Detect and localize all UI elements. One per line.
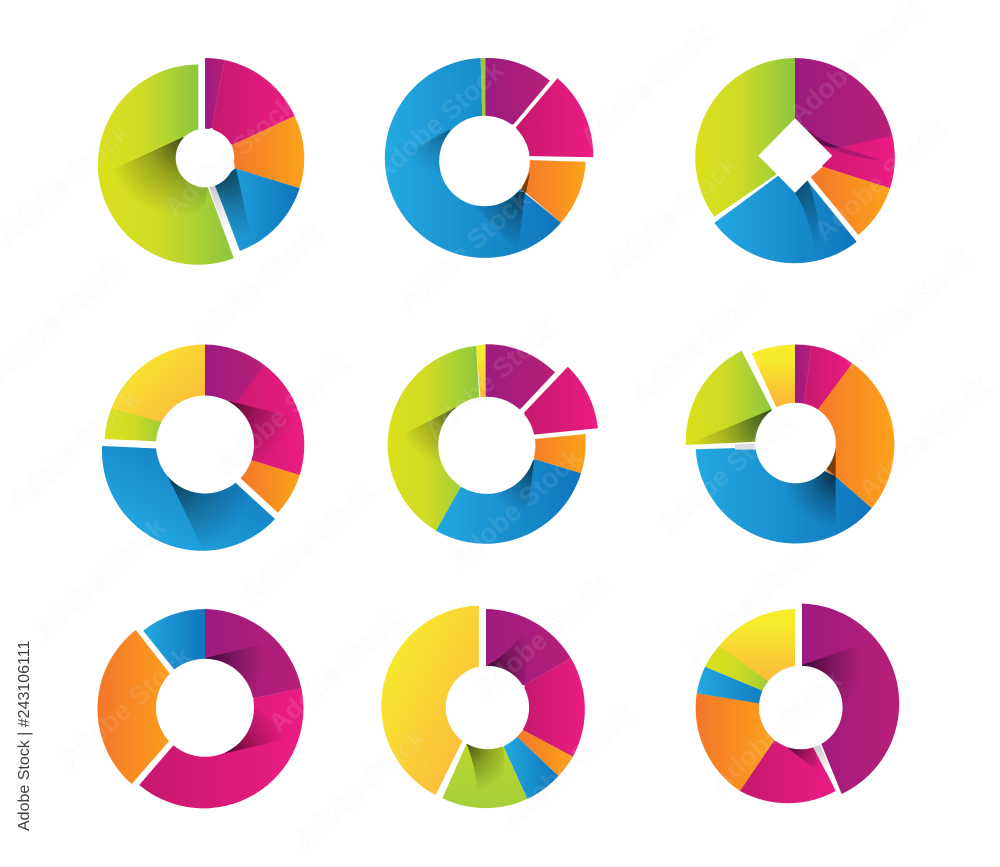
segment: lime bbox=[695, 58, 795, 217]
fold shadow: blue lower bbox=[460, 190, 525, 252]
segment: purple bbox=[205, 344, 264, 401]
segment: magenta bbox=[516, 78, 593, 157]
watermark pattern: Adobe Stock bbox=[601, 148, 744, 282]
segment: lime upper bbox=[98, 64, 198, 173]
fold shadow: magenta bbox=[225, 705, 296, 753]
watermark pattern: Adobe Stock bbox=[835, 242, 978, 376]
stock image id, vertical text: Adobe Stock | #243106111 bbox=[16, 641, 33, 831]
watermark pattern: Adobe Stock bbox=[211, 347, 354, 481]
watermark pattern: Adobe Stock bbox=[679, 535, 822, 669]
segment: lime bbox=[686, 351, 772, 445]
fold shadow: lime bbox=[686, 409, 772, 445]
fold shadow: lime bbox=[105, 137, 208, 240]
segment: blue bbox=[385, 58, 561, 258]
segment: purple bbox=[795, 58, 892, 147]
center hole bbox=[755, 403, 836, 483]
segment: blue bbox=[143, 609, 205, 670]
donut 5 bbox=[388, 344, 598, 544]
watermark pattern: Adobe Stock bbox=[393, 183, 536, 317]
watermark pattern: Adobe Stock bbox=[3, 382, 146, 516]
watermark pattern: Adobe Stock bbox=[471, 570, 614, 704]
fold shadow: magenta bbox=[225, 400, 301, 470]
watermark pattern: Adobe Stock bbox=[55, 640, 198, 774]
watermark pattern: Adobe Stock bbox=[29, 511, 172, 645]
watermark pattern: Adobe Stock bbox=[445, 441, 588, 575]
segment: blue bbox=[436, 459, 581, 544]
fold shadow: magenta bbox=[788, 745, 818, 772]
donut 3: diamond centre bbox=[695, 58, 895, 263]
center hole bbox=[176, 129, 234, 187]
segment: orange bbox=[696, 693, 775, 791]
segment: purple bbox=[205, 58, 225, 130]
watermark pattern: Adobe Stock bbox=[653, 406, 796, 540]
donut 1: five segments with lime exploded bbox=[98, 58, 304, 265]
watermark pattern: Adobe Stock bbox=[627, 277, 770, 411]
segment: purple bbox=[205, 609, 301, 698]
center hole bbox=[446, 666, 529, 749]
center hole bbox=[156, 659, 254, 757]
fold shadow: blue bbox=[480, 461, 534, 535]
donut 4 bbox=[102, 344, 304, 551]
fold shadow: purple bbox=[802, 644, 868, 715]
segment: yellow bbox=[752, 344, 795, 410]
watermark pattern: Adobe Stock bbox=[575, 19, 718, 153]
watermark pattern: Adobe Stock bbox=[853, 371, 996, 505]
watermark pattern: Adobe Stock bbox=[237, 476, 380, 610]
segment: purple bbox=[486, 609, 571, 690]
segment: lime bbox=[388, 346, 481, 531]
center hole bbox=[156, 396, 254, 494]
fold shadow: magenta bbox=[815, 140, 880, 160]
watermark pattern: Adobe Stock bbox=[783, 0, 926, 130]
segment: purple bbox=[486, 344, 555, 410]
segment: purple bbox=[486, 58, 550, 125]
fold shadow: blue upper bbox=[401, 129, 452, 180]
center hole bbox=[759, 666, 843, 749]
watermark pattern: Adobe Stock bbox=[809, 113, 952, 247]
segment: blue bbox=[102, 446, 275, 551]
segment: blue bbox=[215, 168, 300, 251]
fold shadow: blue bbox=[215, 168, 252, 250]
segment: purple bbox=[802, 604, 899, 794]
fold shadow: purple bbox=[486, 623, 528, 690]
segment: orange bbox=[810, 363, 894, 508]
fold shadow: blue bbox=[770, 450, 836, 534]
orange fold shadow bbox=[521, 172, 530, 193]
segment: magenta bbox=[524, 367, 598, 435]
segment: purple sliver bbox=[795, 344, 812, 410]
donut 2: large blue with exploded magenta bbox=[385, 58, 593, 258]
segment: magenta bbox=[220, 365, 304, 475]
gap shadow: blue and lime bbox=[735, 443, 770, 450]
segment: blue bbox=[714, 170, 857, 263]
segment: orange bbox=[517, 730, 573, 776]
fold shadow: blue bbox=[780, 172, 819, 260]
segment: blue bbox=[504, 737, 558, 799]
fold shadow: lime bbox=[466, 740, 505, 797]
watermark pattern: Adobe Stock bbox=[367, 54, 510, 188]
gap shadow bbox=[813, 745, 832, 772]
center hole bbox=[438, 397, 535, 494]
segment: orange bbox=[521, 160, 586, 223]
segment: magenta bbox=[805, 130, 895, 188]
segment: lime sliver bbox=[481, 58, 486, 120]
donut 7 bbox=[97, 609, 303, 808]
segment: magenta bbox=[803, 346, 852, 410]
segment: lime bbox=[442, 744, 527, 808]
segment: magenta bbox=[139, 688, 303, 808]
watermark pattern: Adobe Stock bbox=[705, 664, 848, 798]
segment: orange bbox=[97, 630, 180, 784]
segment: orange bbox=[241, 450, 300, 513]
watermark pattern: Adobe Stock bbox=[419, 312, 562, 446]
orange fold shadow bbox=[826, 450, 836, 477]
watermark pattern: Adobe Stock bbox=[289, 721, 432, 855]
donut 8 bbox=[381, 606, 585, 808]
fold shadow: purple bbox=[795, 118, 840, 148]
watermark pattern: Adobe Stock bbox=[263, 605, 406, 739]
segment: blue bbox=[696, 447, 872, 544]
fold shadow: blue bbox=[168, 470, 275, 550]
center hole bbox=[439, 116, 530, 206]
segment: magenta bbox=[523, 658, 585, 757]
segment: yellow bbox=[111, 344, 205, 427]
watermark pattern: Adobe Stock bbox=[159, 89, 302, 223]
segment: orange bbox=[232, 116, 304, 188]
segment: magenta bbox=[740, 741, 836, 803]
segment: yellow sliver bbox=[476, 344, 485, 400]
fold shadow: purple bbox=[205, 645, 298, 705]
segment: orange bbox=[811, 167, 890, 235]
fold shadow: lime bbox=[391, 407, 462, 480]
gap shadow bbox=[209, 185, 230, 228]
segment: yellow bbox=[719, 609, 795, 690]
donut 6 bbox=[686, 344, 894, 544]
segment: lime bbox=[705, 646, 780, 696]
watermark pattern: Adobe Stock bbox=[497, 699, 640, 833]
segment: lime bbox=[105, 408, 172, 442]
donut 9 bbox=[696, 604, 899, 803]
watermark pattern: Adobe Stock bbox=[185, 218, 328, 352]
segment: yellow bbox=[381, 606, 479, 795]
segment: blue bbox=[697, 667, 775, 706]
segment: orange bbox=[525, 434, 586, 473]
segment: lime lower bbox=[98, 129, 234, 265]
segment: magenta bbox=[212, 60, 295, 145]
centre diamond bbox=[758, 118, 832, 193]
